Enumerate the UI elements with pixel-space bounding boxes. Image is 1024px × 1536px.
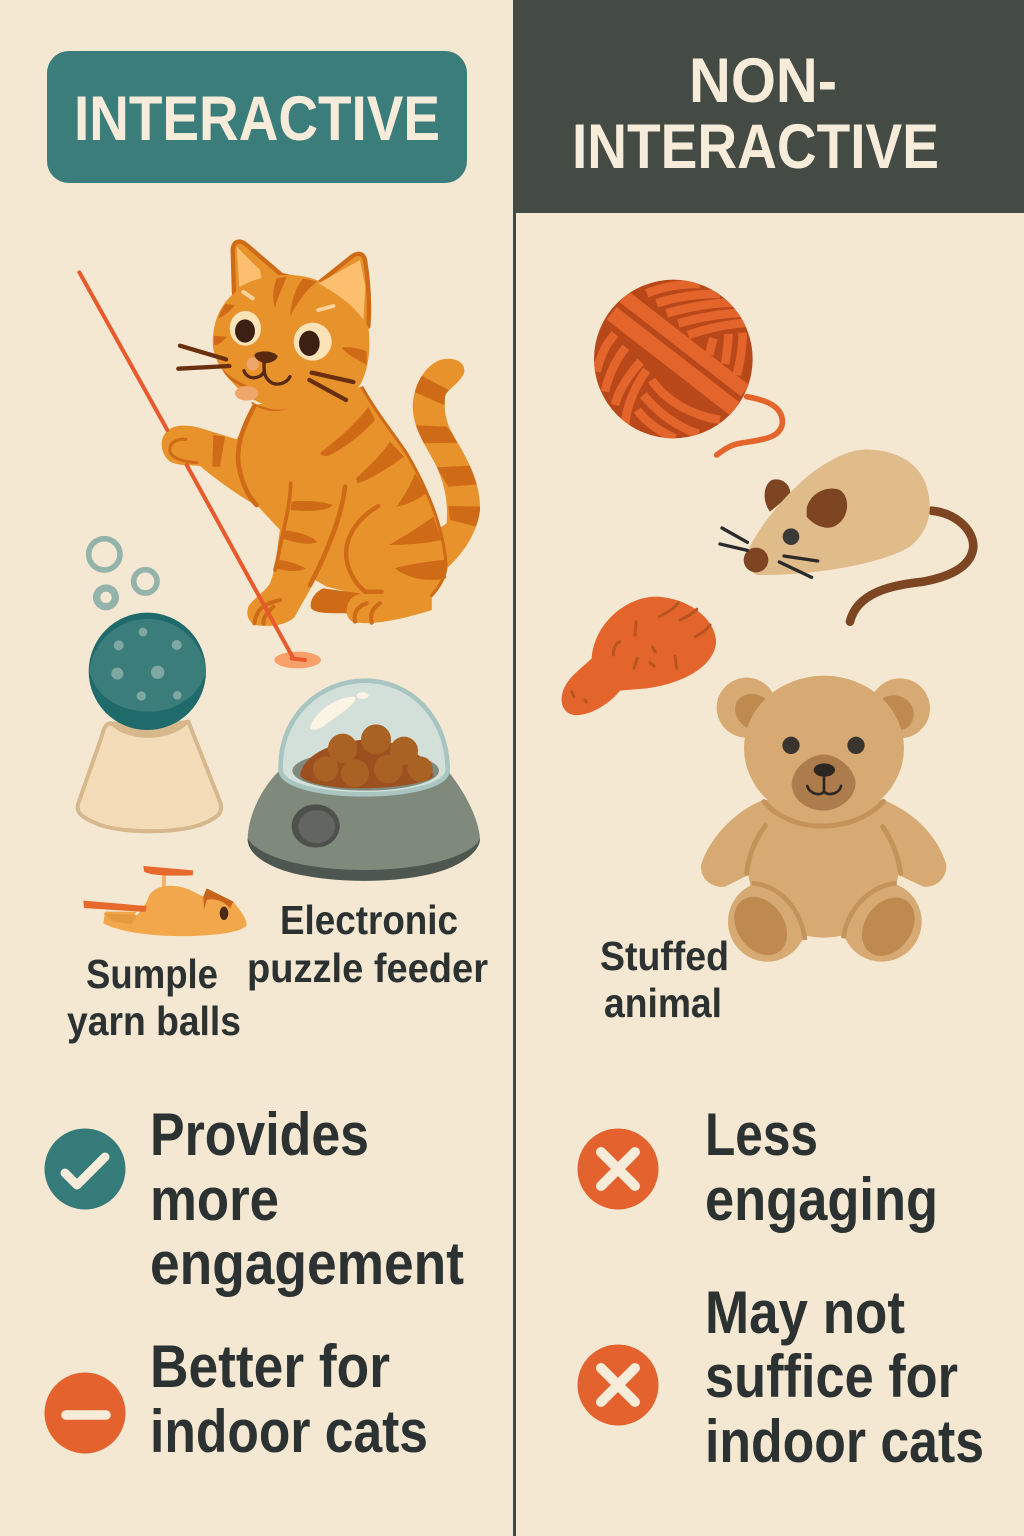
text: less engaging: Less bbox=[705, 1101, 818, 1168]
text: provides more engagement: Provides bbox=[150, 1101, 369, 1168]
text: provides more engagement: engagement bbox=[150, 1230, 464, 1297]
icon: teal check bbox=[44, 1128, 126, 1210]
text: may not suffice for indoor cats: indoor cats bbox=[705, 1408, 984, 1475]
text: may not suffice for indoor cats: suffice for bbox=[705, 1343, 958, 1410]
heading: non-interactive: NON- bbox=[689, 46, 837, 116]
text: may not suffice for indoor cats bbox=[705, 1279, 984, 1475]
text: better for indoor cats: indoor cats bbox=[150, 1398, 428, 1465]
illustration: electronic puzzle feeder bbox=[248, 681, 480, 881]
text: may not suffice for indoor cats: May not bbox=[705, 1279, 905, 1346]
icon: orange x two bbox=[578, 1344, 658, 1426]
heading: interactive: INTERACTIVE bbox=[74, 84, 440, 154]
illustration: teal ball toy with bubbles on a stand bbox=[78, 539, 221, 831]
text: less engaging: engaging bbox=[705, 1166, 938, 1233]
illustration: toy mouse bbox=[720, 449, 973, 622]
illustration: orange tabby cat with wand bbox=[79, 242, 483, 668]
label: electronic puzzle feeder bbox=[247, 897, 488, 991]
label: sumple yarn balls bbox=[67, 951, 241, 1044]
label: stuffed animal: animal bbox=[604, 980, 722, 1026]
text: less engaging bbox=[705, 1101, 938, 1233]
illustration: orange plush toy bbox=[562, 597, 716, 715]
heading: non-interactive bbox=[515, 0, 1024, 213]
panel: non-interactive bbox=[515, 0, 1024, 1475]
text: better for indoor cats bbox=[150, 1333, 428, 1465]
heading: interactive bbox=[47, 51, 467, 183]
label: stuffed animal bbox=[600, 933, 729, 1026]
illustration: teddy bear stuffed animal bbox=[701, 676, 946, 966]
illustration: orange windup mouse toy bbox=[83, 866, 247, 936]
panel: interactive bbox=[44, 51, 488, 1465]
icon: orange x one bbox=[578, 1128, 658, 1210]
icon: orange minus bbox=[44, 1372, 126, 1454]
illustration: ball of yarn bbox=[594, 280, 782, 455]
label: electronic puzzle feeder: puzzle feeder bbox=[247, 945, 488, 991]
label: stuffed animal: Stuffed bbox=[600, 933, 729, 979]
label: electronic puzzle feeder: Electronic bbox=[280, 897, 458, 943]
text: provides more engagement bbox=[150, 1101, 464, 1297]
label: sumple yarn balls: yarn balls bbox=[67, 998, 241, 1044]
text: provides more engagement: more bbox=[150, 1166, 279, 1233]
text: better for indoor cats: Better for bbox=[150, 1333, 390, 1400]
heading: non-interactive: INTERACTIVE bbox=[572, 112, 939, 182]
label: sumple yarn balls: Sumple bbox=[86, 951, 218, 997]
